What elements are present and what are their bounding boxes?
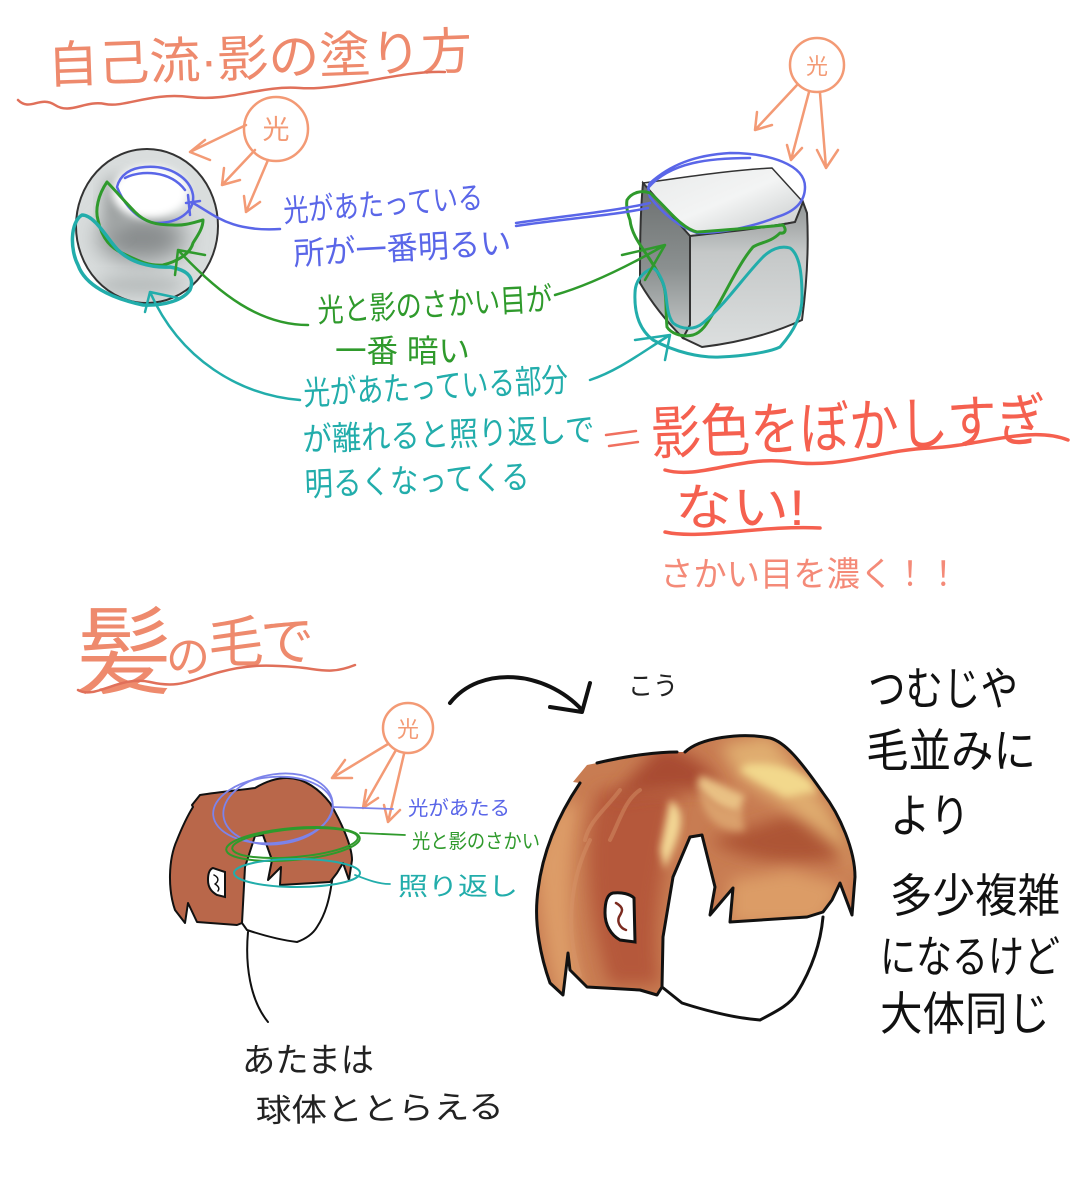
icon: sun cube: 光	[806, 54, 828, 79]
heading: hair: 毛	[208, 611, 264, 674]
ear	[605, 893, 635, 942]
label: reflected light	[145, 292, 670, 503]
icon: sun hair: 光	[397, 717, 419, 742]
sphere reflected light outline	[72, 215, 192, 305]
head	[242, 873, 333, 942]
cube reflected outline	[635, 247, 802, 357]
label: brightest	[193, 180, 650, 272]
sphere diagram	[70, 145, 225, 310]
reflected band	[234, 859, 360, 887]
label: reflected light: 光があたっている部分	[302, 361, 569, 412]
label: darkest boundary: 光と影のさかい目が	[316, 281, 553, 329]
sphere shading	[77, 150, 217, 302]
hair painting	[538, 737, 854, 994]
icon: sun sphere	[190, 97, 308, 212]
small hair illustration	[170, 767, 361, 1022]
text: explanation	[866, 663, 1060, 1040]
hair outline	[537, 736, 855, 995]
face	[662, 917, 823, 1020]
label: reflected light: 明るくなってくる	[304, 458, 530, 503]
icon: sun hair	[332, 703, 433, 822]
ear mark	[214, 875, 219, 891]
text: explanation: つむじや	[868, 663, 1018, 715]
sphere terminator outline	[97, 182, 203, 265]
pointer line	[247, 932, 268, 1022]
large hair illustration	[530, 725, 865, 1020]
label: head as sphere: 球体ととらえる	[255, 1089, 504, 1129]
terminator band	[225, 822, 361, 866]
label: brightest: 光があたっている	[282, 180, 484, 229]
ear	[208, 868, 225, 897]
cube diagram	[627, 153, 808, 357]
icon: sun sphere: 光	[262, 115, 290, 145]
label: brightest: 所が一番明るい	[292, 225, 512, 272]
label: darkest boundary	[175, 245, 665, 369]
sphere highlight outline	[117, 167, 200, 223]
heading: hair	[76, 600, 355, 707]
heading: hair: で	[260, 612, 314, 672]
light band	[210, 767, 337, 851]
label: head as sphere: あたまは	[242, 1042, 374, 1080]
text: explanation: より	[890, 790, 970, 842]
cube terminator outline	[627, 192, 785, 336]
heading: hair: 髪	[76, 600, 172, 707]
cube top	[643, 168, 803, 236]
ear mark	[616, 903, 626, 930]
small hair labels	[333, 797, 540, 901]
heading: hair: の	[166, 633, 210, 682]
label: darkest boundary: 一番 暗い	[335, 333, 470, 369]
text: explanation: 多少複雑	[890, 870, 1060, 922]
arrow: before to after	[450, 677, 590, 712]
text: explanation: 大体同じ	[880, 988, 1050, 1040]
label: like this: こう	[628, 671, 678, 701]
cube left face	[640, 183, 690, 338]
sphere outline	[76, 149, 218, 303]
cube highlight outline	[648, 153, 805, 233]
label: reflected light: が離れると照り返しで	[302, 411, 595, 458]
hair mass	[170, 778, 352, 925]
small hair labels: 光があたる	[408, 797, 510, 820]
cube right face	[683, 202, 808, 347]
callout: do not over-blur	[606, 388, 1068, 594]
title: 自己流·影の塗り方	[46, 23, 473, 94]
small hair labels: 光と影のさかい	[412, 830, 540, 853]
text: explanation: 毛並みに	[866, 725, 1036, 777]
label: head as sphere	[242, 1042, 504, 1129]
callout: do not over-blur: ない!	[675, 480, 805, 536]
small hair labels: 照り返し	[398, 873, 518, 901]
icon: sun cube	[755, 38, 844, 168]
callout: do not over-blur: さかい目を濃く！！	[660, 556, 960, 594]
